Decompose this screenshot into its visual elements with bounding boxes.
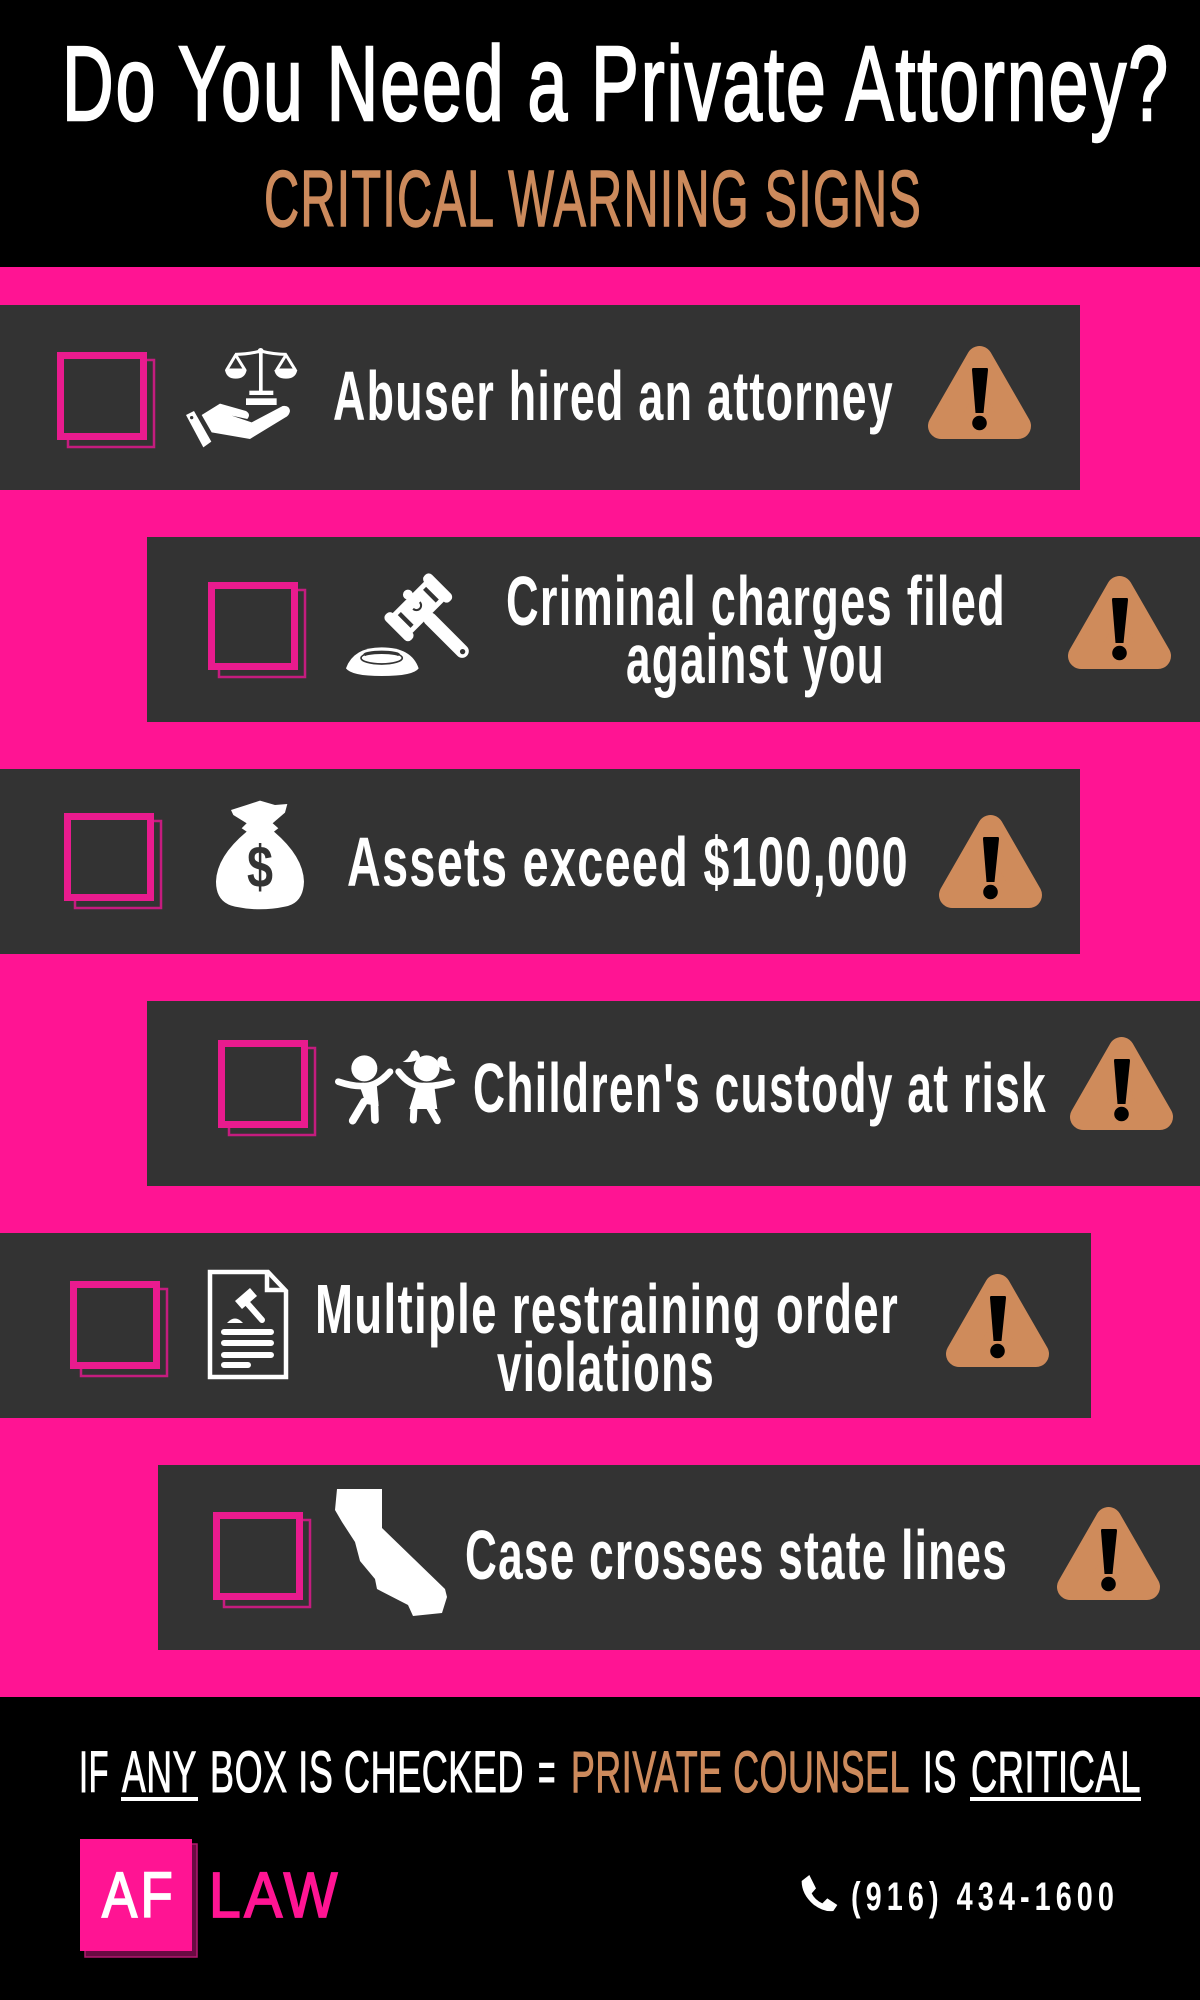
callout: PRIVATE COUNSEL [571, 1740, 910, 1805]
logo: AF [102, 1859, 176, 1931]
label: violations [497, 1328, 715, 1406]
label: Assets exceed $100,000 [347, 823, 909, 901]
icon: california [335, 1489, 447, 1616]
checkbox [216, 1516, 310, 1607]
icon: phone [802, 1875, 837, 1911]
icon: scales of justice on hand [186, 348, 297, 447]
icon: warning [952, 828, 1029, 899]
label [506, 562, 1006, 698]
panel: state lines [158, 1465, 1200, 1650]
label: against you [626, 620, 885, 698]
panel: restraining order violations [0, 1233, 1091, 1418]
callout: IF [79, 1740, 109, 1805]
checkbox [212, 586, 305, 677]
logo [80, 1839, 341, 1957]
icon: gavel [346, 569, 490, 679]
checkbox [60, 356, 154, 447]
panel: criminal charges [147, 537, 1200, 722]
icon: warning [1083, 1050, 1160, 1121]
panel: assets [0, 769, 1080, 954]
panel: custody [147, 1001, 1200, 1186]
callout: IS [923, 1740, 957, 1805]
callout: = [538, 1740, 556, 1805]
icon: children [338, 1050, 452, 1121]
icon: warning [1081, 589, 1158, 660]
panel: abuser hired an attorney [0, 305, 1080, 490]
contact [802, 1875, 1119, 1919]
icon: money bag: $ [247, 833, 273, 900]
label [315, 1270, 899, 1406]
icon: money bag [216, 801, 304, 909]
checkbox [74, 1284, 167, 1376]
label: Multiple restraining order [315, 1270, 899, 1348]
header [62, 25, 1170, 243]
callout: BOX IS CHECKED [210, 1740, 524, 1805]
callout: ANY [122, 1740, 197, 1805]
checkbox [222, 1044, 315, 1135]
pink background [0, 267, 1200, 1697]
logo: LAW [209, 1859, 341, 1931]
icon: warning [1070, 1520, 1147, 1591]
icon: warning [959, 1287, 1036, 1358]
checkbox [68, 816, 161, 908]
callout [79, 1740, 1141, 1805]
icon: legal document [210, 1272, 286, 1377]
icon: warning [941, 359, 1018, 430]
label: Abuser hired an attorney [333, 357, 894, 435]
